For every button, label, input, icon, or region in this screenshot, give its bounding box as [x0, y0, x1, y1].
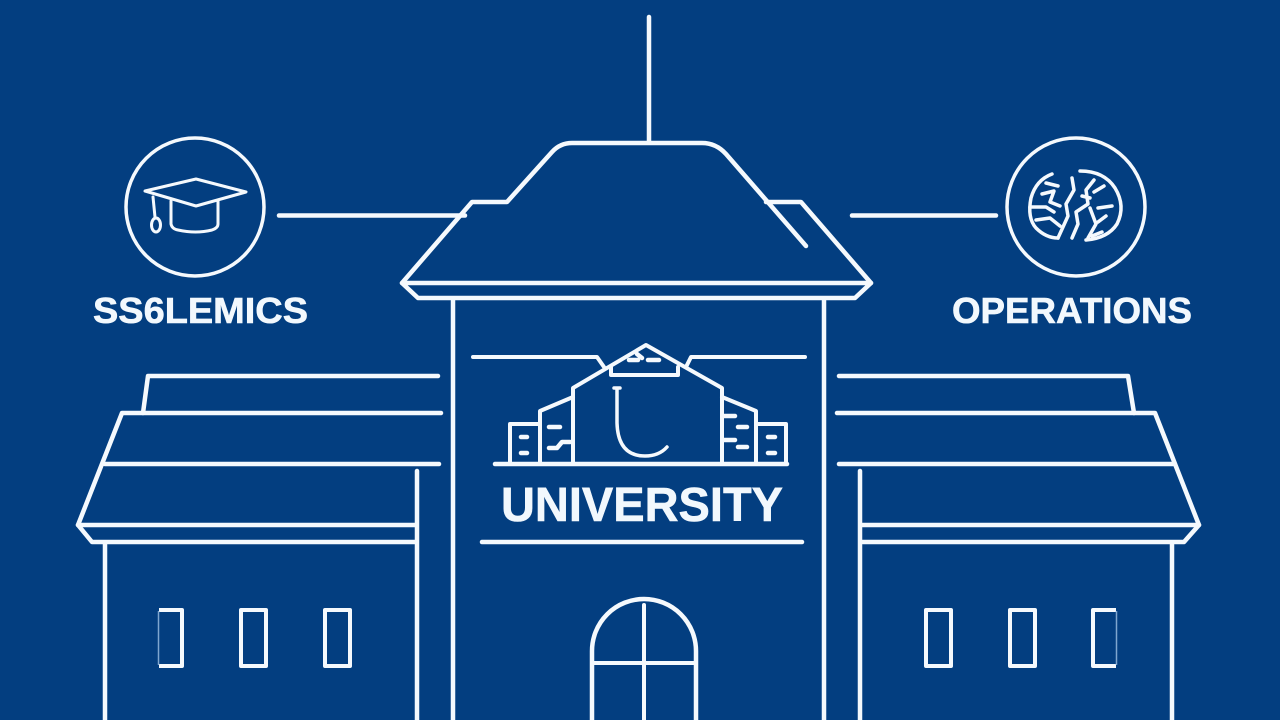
left wing windows — [158, 610, 350, 666]
logo top rules — [473, 357, 805, 367]
operations label: OPERATIONS — [952, 290, 1192, 331]
university wordmark: UNIVERSITY — [501, 479, 783, 532]
rule under wordmark — [482, 540, 802, 544]
icon: brain in circle — [1007, 138, 1145, 276]
arched door window — [592, 599, 696, 720]
logo main building — [573, 345, 722, 463]
right wing roof — [837, 376, 1199, 542]
left wing walls — [105, 471, 417, 720]
icon: graduation cap in circle — [126, 138, 264, 276]
logo gable window — [611, 354, 678, 375]
academics label: SS6LEMICS — [93, 290, 308, 331]
left wing — [78, 376, 441, 720]
connector line — [279, 213, 465, 218]
left wing roof — [78, 376, 441, 542]
antenna spire — [647, 17, 651, 142]
central tower roof — [402, 143, 871, 298]
logo right buildings — [722, 397, 786, 463]
panel: academics — [93, 138, 465, 331]
right wing — [837, 376, 1199, 720]
connector line — [852, 213, 996, 218]
panel: operations — [852, 138, 1192, 331]
logo baseline — [495, 462, 787, 466]
logo left buildings — [510, 397, 573, 463]
university logo — [473, 345, 805, 542]
right wing windows — [926, 610, 1116, 666]
central tower walls — [453, 300, 824, 720]
logo letter mark — [614, 388, 667, 456]
right wing walls — [860, 471, 1172, 720]
